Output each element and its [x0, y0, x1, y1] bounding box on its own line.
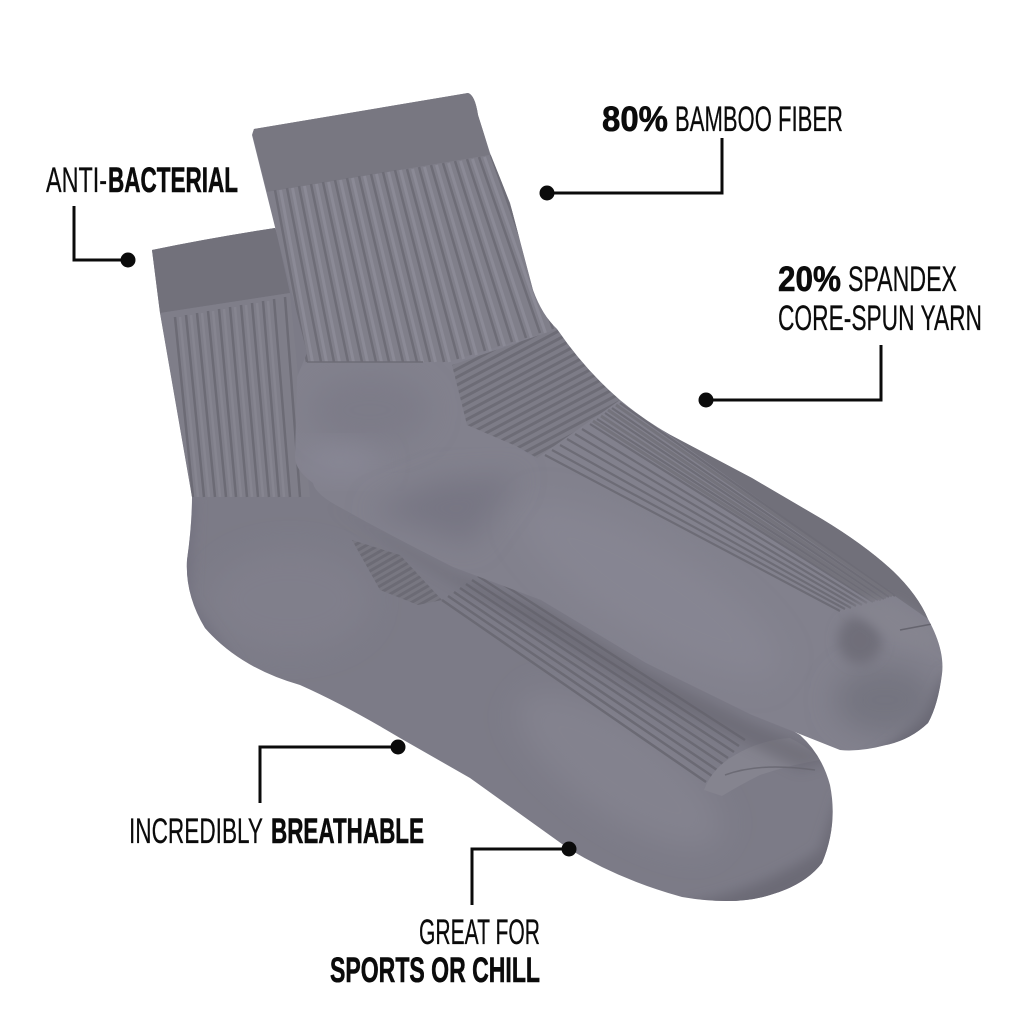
callout: 20% spandex core-spun yarn: 20%	[778, 260, 841, 299]
callout: incredibly breathable: INCREDIBLY	[129, 812, 263, 851]
callout: anti-bacterial	[46, 161, 238, 268]
callout: 80% bamboo fiber: BAMBOO FIBER	[675, 100, 843, 139]
callout: 20% spandex core-spun yarn	[698, 260, 982, 408]
front sock	[240, 85, 960, 780]
back sock	[140, 220, 850, 930]
back sock toe flap	[711, 749, 820, 792]
front sock foot ribbing	[545, 400, 928, 619]
soft shadow between socks	[470, 585, 822, 768]
callout: 20% spandex core-spun yarn: SPANDEX	[848, 260, 957, 299]
back sock shading	[160, 500, 850, 930]
callout: anti-bacterial: BACTERIAL	[108, 161, 238, 200]
sock illustration: pair of grey socks	[140, 85, 960, 930]
back sock foot ribbing	[442, 572, 745, 782]
back sock cuff	[150, 226, 290, 313]
front sock cuff	[250, 90, 490, 192]
callout: 80% bamboo fiber	[540, 100, 843, 200]
callout: incredibly breathable: BREATHABLE	[271, 812, 424, 851]
infographic: bamboo socks features	[46, 93, 980, 982]
callout: great for sports or chill	[330, 842, 576, 990]
back sock leg ribbing	[160, 293, 310, 497]
callout: incredibly breathable	[129, 740, 424, 851]
callout: great for sports or chill: GREAT FOR	[419, 913, 540, 952]
callout: great for sports or chill: SPORTS OR CHILL	[330, 951, 540, 990]
front sock shading	[300, 375, 960, 780]
back sock ankle hatching	[352, 540, 442, 605]
front sock toe	[854, 599, 941, 652]
front sock leg ribbing	[267, 155, 557, 362]
front sock ankle hatching	[452, 329, 620, 458]
callout: anti-bacterial: ANTI-	[46, 161, 107, 200]
callout: 80% bamboo fiber: 80%	[602, 100, 668, 139]
